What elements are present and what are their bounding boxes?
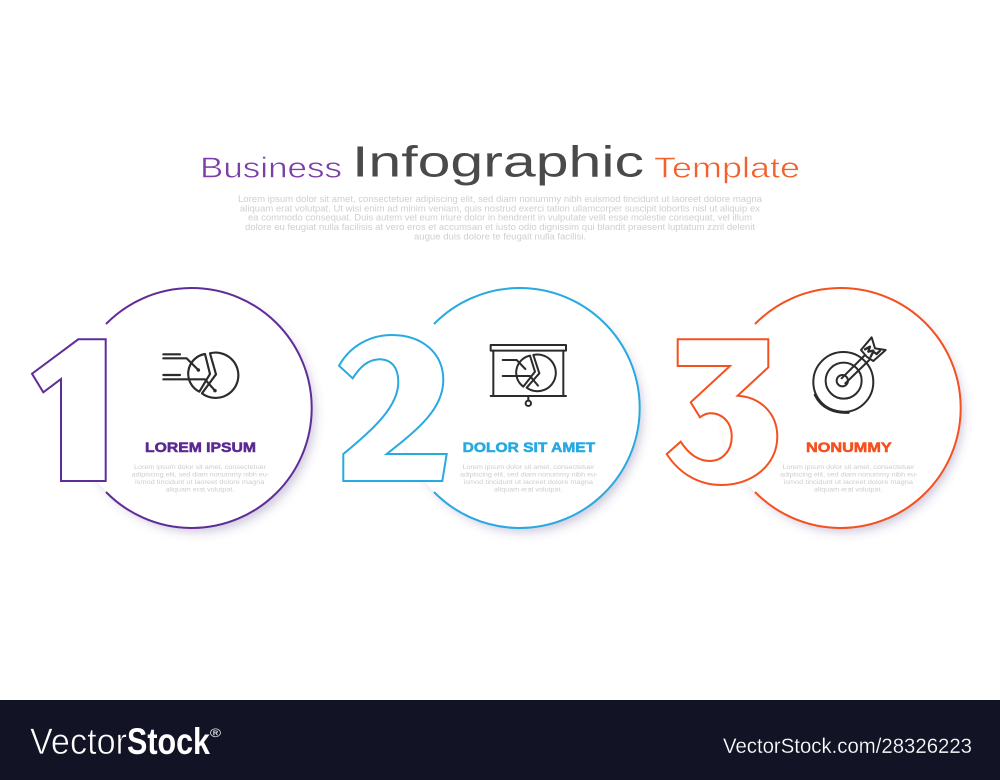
body text 3: adipiscing elit, sed diam nonummy nibh eu- xyxy=(780,472,918,478)
body text 1: ismod tincidunt ut laoreet dolore magna xyxy=(135,479,265,486)
heading: nonummy: NONUMMY xyxy=(806,439,892,455)
circle arc 1 xyxy=(106,288,312,528)
heading: lorem ipsum: LOREM IPSUM xyxy=(145,439,256,455)
body text 3: aliquam erat volutpat. xyxy=(814,486,883,494)
body text 3 xyxy=(780,464,918,494)
body text 1: adipiscing elit, sed diam nonummy nibh eu- xyxy=(132,472,269,478)
intro text block: ea commodo consequat. Duis autem vel eum iriure dolor in hendrerit in vulputate velit esse molestie consequat, vel illum xyxy=(248,212,752,222)
footer logo: Stock xyxy=(127,721,210,762)
body text 1 xyxy=(132,464,269,494)
body text 2 xyxy=(460,464,598,494)
footer band xyxy=(0,700,1000,780)
body text 1: aliquam erat volutpat. xyxy=(166,486,234,494)
icon: pie chart xyxy=(163,353,238,398)
footer image id: VectorStock.com/28326223 xyxy=(723,735,972,758)
body text 2: ismod tincidunt ut laoreet dolore magna xyxy=(464,479,594,486)
icon: target with arrow xyxy=(813,337,886,412)
intro text block: Lorem ipsum dolor sit amet, consectetuer adipiscing elit, sed diam nonummy nibh euismod tincidunt ut laoreet dolore magna xyxy=(238,194,763,204)
number 3 xyxy=(667,339,777,485)
body text 3: Lorem ipsum dolor sit amet, consectetuer xyxy=(782,464,915,471)
panel: step 1 xyxy=(32,288,315,532)
title: Business xyxy=(200,152,342,184)
intro text block: augue duis dolore te feugait nulla facilisi. xyxy=(414,232,586,242)
intro text block: dolore eu feugiat nulla facilisis at vero eros et accumsan et iusto odio dignissim qui blandit praesent luptatum zzril delenit xyxy=(245,222,755,232)
panel: step 3 xyxy=(667,288,963,532)
intro text block: aliquam erat volutpat. Ut wisi enim ad minim veniam, quis nostrud exerci tation ullamcorper suscipit lobortis nisl ut aliquip ex xyxy=(240,204,760,214)
icon: presentation board with pie chart xyxy=(491,345,566,406)
heading: dolor sit amet: DOLOR SIT AMET xyxy=(463,439,596,455)
footer logo: Vector xyxy=(30,721,127,762)
panel: step 2 xyxy=(339,288,642,532)
body text 2: Lorem ipsum dolor sit amet, consectetuer xyxy=(462,464,595,471)
body text 2: aliquam erat volutpat. xyxy=(494,486,563,494)
body text 1: Lorem ipsum dolor sit amet, consectetuer xyxy=(134,464,267,471)
title xyxy=(200,138,800,187)
footer logo: ® xyxy=(210,726,221,740)
circle arc 3 xyxy=(755,288,961,528)
number 2 xyxy=(339,335,447,481)
number 1 xyxy=(32,339,106,481)
body text 2: adipiscing elit, sed diam nonummy nibh eu- xyxy=(460,472,598,478)
title: Infographic xyxy=(352,138,644,187)
intro text block xyxy=(238,194,763,242)
footer logo xyxy=(30,721,221,762)
body text 3: ismod tincidunt ut laoreet dolore magna xyxy=(784,479,914,486)
circle arc 2 xyxy=(434,288,640,528)
title: Template xyxy=(654,152,800,184)
